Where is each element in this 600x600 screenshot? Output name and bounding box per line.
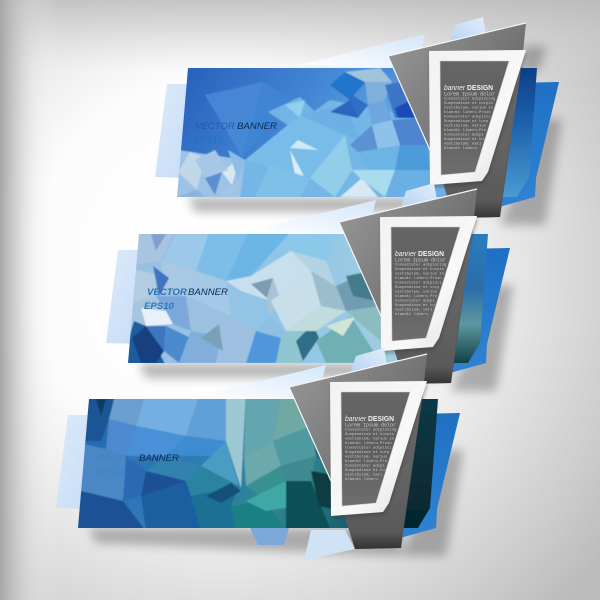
- upper pale strip three: [199, 365, 326, 399]
- upper pale tab: [450, 17, 487, 40]
- tag text three: blandit libero.: [345, 477, 380, 482]
- tag text two: [395, 249, 446, 317]
- tag text three: vestibulum, vari: [345, 472, 383, 478]
- tag text three: Lorem Ipsum dolor: [345, 422, 396, 428]
- mosaic image three: [78, 399, 438, 528]
- tag text: blandit libero.Pro: [444, 128, 487, 133]
- lower blue tab: [250, 528, 289, 545]
- tag text three: [345, 414, 396, 482]
- pale back panel: [155, 84, 200, 178]
- tag text: vestibulum, varius: [444, 124, 487, 128]
- tag text: Suspendisse et turp: [444, 119, 489, 124]
- side blue panel: [499, 82, 559, 207]
- tag text three: Consectetur adipi: [345, 464, 385, 468]
- gray tag: [388, 23, 526, 218]
- side blue panel three: [400, 413, 460, 538]
- tag text: Suspendisse et turpis: [444, 101, 494, 106]
- banner text three: EPS10: [95, 467, 126, 478]
- panel: banner one: [155, 17, 562, 225]
- tag text: vestibulum, vari: [444, 142, 482, 146]
- tag text: blandit libero.Proin: [444, 110, 491, 115]
- mosaic image: [177, 68, 537, 197]
- white frame three: [330, 381, 428, 519]
- tag text two: Lorem Ipsum dolor: [395, 258, 446, 264]
- infographic banners: [56, 17, 562, 560]
- white frame: [429, 50, 527, 188]
- tag text: blandit libero.: [444, 146, 479, 151]
- gray tag three: [289, 354, 427, 549]
- banner text three: VECTOR: [98, 453, 138, 464]
- tag text three: Suspendisse et turpis: [345, 432, 395, 437]
- shadows two: [139, 285, 513, 391]
- lower pale strip: [304, 530, 355, 560]
- tag text two: blandit libero.Proin: [395, 276, 442, 281]
- banner text: EPS10: [193, 135, 224, 146]
- panel: banner two: [106, 183, 513, 391]
- tag text two: blandit libero.: [395, 312, 430, 317]
- banner text three: BANNER: [139, 453, 179, 464]
- tag text two: vestibulum, varius in: [395, 272, 444, 276]
- tag text: Consectetur adipisci: [444, 114, 491, 120]
- panel: banner three: [56, 348, 463, 560]
- tag text three: Suspendisse et tu: [345, 468, 385, 473]
- tag text: Consectetur adipiscing: [444, 96, 495, 102]
- tag text three: blandit libero.Proin: [345, 441, 392, 446]
- side blue panel two: [450, 248, 510, 373]
- tag text three: vestibulum, varius: [345, 454, 388, 460]
- banner text: VECTOR: [195, 121, 235, 132]
- tag text three: Suspendisse et turp: [345, 450, 390, 455]
- gray tag two: [339, 189, 477, 384]
- tag text two: Suspendisse et turp: [395, 285, 440, 290]
- tag text: Consectetur adipi: [444, 132, 484, 138]
- upper pale strip: [298, 34, 425, 68]
- tag text two: vestibulum, vari: [395, 308, 433, 312]
- shadows three: [89, 450, 463, 556]
- tag text two: Suspendisse et turpis: [395, 267, 445, 272]
- banner text two: VECTOR: [147, 287, 187, 298]
- tag text two: Consectetur adipiscing: [395, 262, 446, 268]
- tag text two: vestibulum, varius: [395, 290, 438, 294]
- banner text: [193, 121, 277, 146]
- tag text: [444, 83, 495, 151]
- banner text three: [95, 453, 179, 478]
- tag text three: Consectetur adipisci: [345, 446, 392, 450]
- white frame two: [380, 216, 478, 354]
- banner text two: [144, 287, 228, 312]
- shadows: [188, 46, 562, 225]
- tag text two: blandit libero.Pro: [395, 294, 438, 299]
- tag text: Suspendisse et tu: [444, 137, 484, 142]
- tag text: vestibulum, varius in: [444, 106, 493, 110]
- upper pale tab two: [401, 183, 438, 206]
- tag text two: Consectetur adipi: [395, 298, 435, 304]
- banner text: BANNER: [237, 121, 277, 132]
- tag text three: blandit libero.Pro: [345, 459, 388, 464]
- tag text three: Consectetur adipiscing: [345, 428, 396, 432]
- tag text three: banner DESIGN: [345, 414, 394, 423]
- pale back panel two: [106, 250, 151, 344]
- tag text two: Consectetur adipisci: [395, 280, 442, 286]
- tag text: banner DESIGN: [444, 83, 493, 92]
- tag text two: Suspendisse et tu: [395, 303, 435, 308]
- tag text three: vestibulum, varius in: [345, 436, 394, 442]
- pale back panel three: [56, 415, 101, 509]
- tag text: Lorem Ipsum dolor: [444, 92, 495, 98]
- upper pale tab three: [351, 348, 388, 371]
- tag text two: banner DESIGN: [395, 249, 444, 258]
- banner text two: BANNER: [188, 287, 228, 298]
- upper pale strip two: [249, 200, 376, 234]
- mosaic image two: [128, 234, 488, 363]
- banner text two: EPS10: [144, 301, 175, 312]
